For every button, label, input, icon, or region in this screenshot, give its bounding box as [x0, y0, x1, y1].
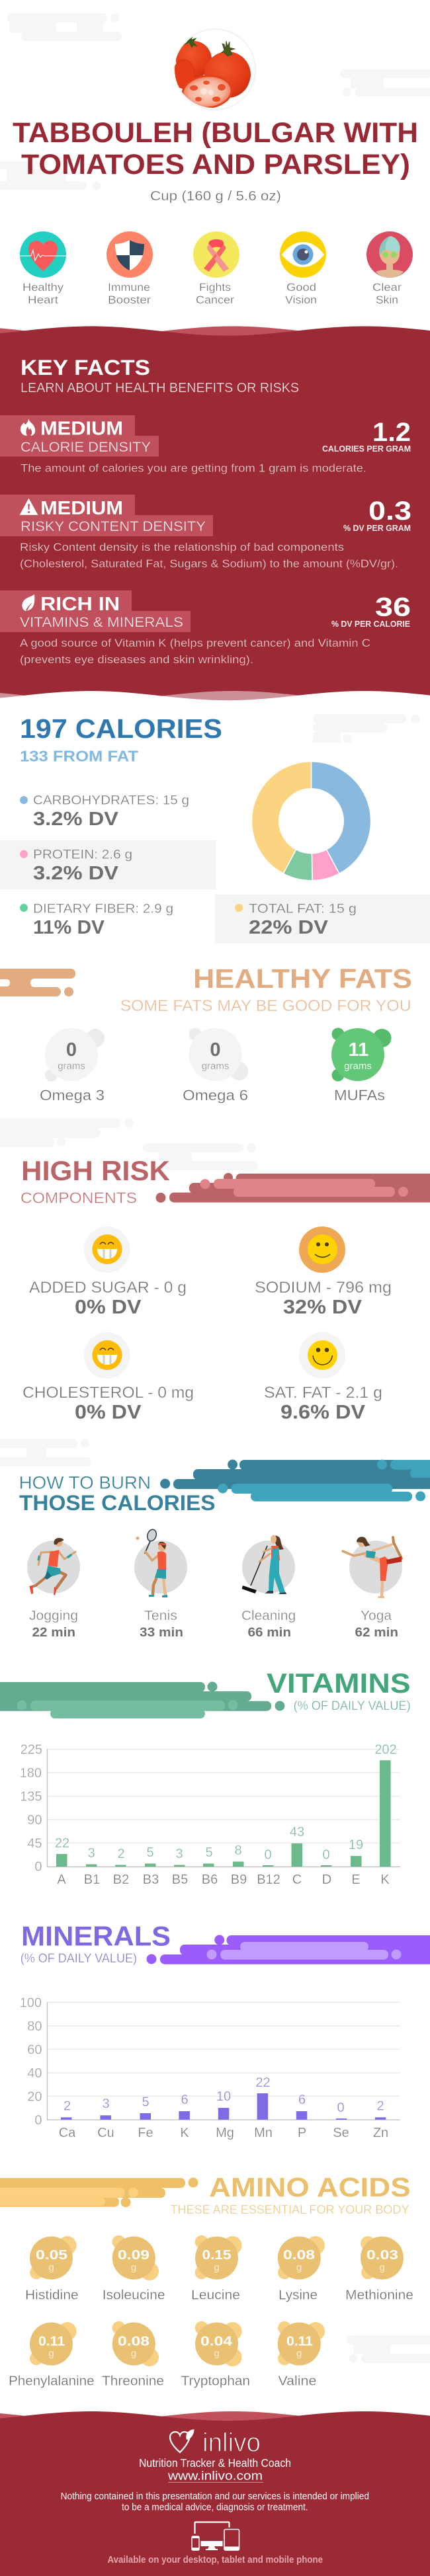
exercise: yoga	[343, 1537, 402, 1598]
risk: added sugar: 0% DV	[75, 1296, 142, 1318]
exercise labels: 66 min	[247, 1625, 291, 1640]
bar chart: minerals: 6	[181, 2093, 189, 2107]
bar chart: vitamins: 0	[34, 1860, 42, 1874]
exercise labels: Tenis	[144, 1609, 177, 1623]
bar chart: minerals: 5	[142, 2095, 150, 2110]
heading	[267, 1668, 411, 1713]
panel: footer	[0, 2411, 430, 2576]
fact: calorie density: CALORIE DENSITY	[21, 440, 151, 455]
website link: www.inlivo.com	[167, 2469, 263, 2483]
bar chart: minerals: Cu	[97, 2126, 114, 2140]
bar chart: vitamins: E	[351, 1872, 361, 1887]
fact: risky content density: % DV PER GRAM	[343, 523, 411, 533]
stat: omega 6: 0	[210, 1039, 221, 1061]
panel: high risk	[21, 1155, 430, 1424]
fact: risky content density: Risky Content density is the relationship of bad components	[20, 542, 344, 553]
bar chart: minerals: 0	[34, 2113, 42, 2128]
icon: devices	[192, 2522, 239, 2550]
benefit labels: Vision	[285, 294, 317, 306]
heading	[19, 1473, 215, 1515]
amino: lysine: Lysine	[279, 2288, 318, 2303]
bar chart: vitamins: 45	[27, 1836, 42, 1851]
bar chart: minerals: Se	[333, 2126, 349, 2140]
bar chart: minerals: Fe	[138, 2126, 153, 2140]
amino: threonine	[102, 2321, 164, 2389]
bar chart: minerals: Mn	[254, 2126, 273, 2140]
legend: carbohydrates	[20, 794, 189, 830]
donut chart	[251, 762, 371, 881]
panel: key facts	[0, 326, 430, 711]
legend: dietary fiber: DIETARY FIBER: 2.9 g	[33, 903, 173, 916]
benefit labels: Clear	[372, 282, 402, 294]
heading	[21, 1155, 170, 1207]
legend: protein	[0, 840, 216, 889]
stat: mufas: 11	[349, 1039, 368, 1061]
amino: histidine: Histidine	[25, 2288, 79, 2303]
amino: valine: Valine	[278, 2374, 316, 2389]
amino: leucine: g	[214, 2262, 220, 2273]
panel: minerals	[20, 1921, 430, 2140]
amino: valine	[278, 2321, 325, 2389]
bar chart: vitamins	[20, 1743, 400, 1887]
amino: isoleucine: Isoleucine	[103, 2288, 165, 2303]
exercise labels: Yoga	[361, 1609, 392, 1623]
amino: methionine: Methionine	[345, 2288, 413, 2303]
key facts heading: LEARN ABOUT HEALTH BENEFITS OR RISKS	[21, 381, 299, 395]
fact: risky content density: (Cholesterol, Saturated Fat, Sugars & Sodium) to the amount (%DV/gr).	[20, 558, 398, 570]
risk: added sugar	[29, 1227, 187, 1318]
benefit labels: Fights	[199, 282, 231, 294]
bar chart: minerals: 20	[27, 2089, 42, 2104]
heading: SOME FATS MAY BE GOOD FOR YOU	[120, 997, 411, 1015]
legend: carbohydrates: 3.2% DV	[33, 809, 119, 830]
amino: threonine: g	[131, 2348, 136, 2359]
amino: histidine: 0.05	[36, 2247, 67, 2263]
stat: omega 3: 0	[66, 1039, 77, 1061]
benefit labels: Heart	[28, 294, 58, 306]
risk: saturated fat: 9.6% DV	[280, 1402, 365, 1424]
bar chart: vitamins: 3	[87, 1846, 95, 1861]
icon: flame	[21, 419, 35, 436]
bar chart: minerals: Mg	[216, 2126, 234, 2140]
bar chart: minerals	[20, 1995, 400, 2140]
stat: omega 3: Omega 3	[40, 1087, 105, 1104]
bar chart: vitamins: 8	[234, 1843, 242, 1858]
exercise labels: 22 min	[32, 1625, 75, 1640]
risk: saturated fat	[264, 1332, 382, 1424]
fact: rich in vitamins and minerals	[0, 590, 411, 666]
bar chart: minerals: Ca	[59, 2126, 76, 2140]
bar chart: vitamins: 43	[290, 1825, 304, 1839]
amino: phenylalanine: Phenylalanine	[9, 2374, 95, 2389]
bar chart: vitamins: 3	[175, 1847, 183, 1861]
logo: inlivo: inlivo	[202, 2429, 261, 2458]
exercise: cleaning	[242, 1535, 295, 1594]
icon: immune booster	[107, 231, 153, 278]
heading: AMINO ACIDS	[209, 2172, 411, 2202]
availability note: Available on your desktop, tablet and mobile phone	[107, 2554, 323, 2565]
amino: lysine: 0.08	[283, 2247, 315, 2263]
bar chart: minerals: 10	[216, 2089, 231, 2104]
bar chart: vitamins: 5	[146, 1845, 154, 1860]
heading: VITAMINS	[267, 1668, 411, 1699]
logo: inlivo	[170, 2429, 261, 2458]
bar chart: vitamins: B1	[84, 1872, 100, 1887]
amino: leucine	[191, 2235, 242, 2303]
calories heading: 197 CALORIES	[20, 713, 222, 744]
icon: healthy heart	[20, 231, 66, 278]
legend: protein: 3.2% DV	[33, 863, 119, 884]
header ornament	[160, 1460, 430, 1502]
amino: isoleucine	[103, 2235, 165, 2303]
bar chart: vitamins: B2	[113, 1872, 129, 1887]
amino: phenylalanine: 0.11	[38, 2334, 65, 2349]
legend: carbohydrates: CARBOHYDRATES: 15 g	[33, 794, 189, 808]
benefit labels: Booster	[108, 294, 151, 306]
legend: dietary fiber: 11% DV	[33, 917, 105, 938]
calories heading: 133 FROM FAT	[20, 748, 139, 765]
exercise: jogging	[27, 1538, 80, 1595]
amino: methionine: g	[379, 2262, 385, 2273]
fact: calorie density	[0, 415, 411, 475]
bar chart: vitamins: 225	[21, 1743, 42, 1757]
bar chart: minerals: 100	[20, 1995, 42, 2010]
bar chart: minerals: 6	[298, 2093, 306, 2107]
risk: added sugar: ADDED SUGAR - 0 g	[29, 1279, 187, 1297]
bar chart: vitamins: C	[292, 1872, 302, 1887]
amino: methionine	[345, 2236, 413, 2303]
bar chart: minerals: Zn	[373, 2126, 388, 2140]
benefits row	[20, 231, 413, 306]
fact: rich in vitamins and minerals: 36	[375, 593, 411, 622]
amino: lysine: g	[296, 2262, 302, 2273]
icon: clear skin	[366, 231, 413, 278]
heading: COMPONENTS	[21, 1189, 137, 1207]
bar chart: vitamins: A	[57, 1872, 66, 1887]
exercise labels	[29, 1609, 398, 1640]
icon: warning triangle	[20, 499, 38, 515]
amino: histidine	[25, 2236, 79, 2303]
calories heading	[20, 713, 222, 765]
title: TOMATOES AND PARSLEY)	[21, 149, 410, 181]
key facts heading	[21, 356, 299, 395]
bar chart: vitamins: 19	[349, 1838, 363, 1853]
bar chart: vitamins: D	[322, 1872, 331, 1887]
amino: tryptophan: 0.04	[200, 2334, 233, 2349]
exercise labels: 62 min	[355, 1625, 398, 1640]
risk: sodium: 32% DV	[283, 1296, 362, 1318]
bar chart: minerals: 40	[27, 2066, 42, 2081]
bar chart: minerals: K	[180, 2126, 189, 2140]
legend: dietary fiber	[20, 903, 173, 938]
amino: threonine: Threonine	[102, 2374, 164, 2389]
stat: mufas	[331, 1027, 392, 1104]
heading: (% OF DAILY VALUE)	[21, 1951, 137, 1966]
title	[13, 117, 418, 181]
amino: isoleucine: 0.09	[118, 2247, 150, 2263]
stat: mufas: grams	[344, 1061, 372, 1072]
benefit labels: Cancer	[196, 294, 235, 306]
key facts heading: KEY FACTS	[21, 356, 150, 380]
amino: leucine: 0.15	[202, 2247, 232, 2263]
legend: total fat: 22% DV	[249, 917, 329, 938]
risk: cholesterol	[22, 1332, 194, 1424]
header ornament	[0, 2178, 198, 2207]
panel: vitamins	[0, 1668, 411, 1887]
header ornament	[0, 1682, 284, 1718]
amino: histidine: g	[48, 2262, 54, 2273]
bar chart: minerals: 22	[255, 2075, 271, 2090]
fact: risky content density: RISKY CONTENT DENSITY	[21, 519, 206, 534]
amino: tryptophan: Tryptophan	[181, 2374, 250, 2389]
heading: (% OF DAILY VALUE)	[294, 1699, 411, 1713]
benefit labels: Skin	[376, 294, 398, 306]
bar chart: minerals: 2	[64, 2099, 71, 2114]
amino: valine: g	[296, 2348, 302, 2359]
bar chart: minerals: 60	[27, 2042, 42, 2057]
benefit labels: Good	[286, 282, 316, 294]
amino: phenylalanine	[9, 2322, 95, 2389]
image: tomatoes	[173, 29, 255, 110]
heading: HOW TO BURN	[19, 1473, 151, 1493]
icon: fights cancer ribbon	[193, 231, 239, 278]
bar chart: vitamins: B6	[202, 1872, 218, 1887]
fact: calorie density: The amount of calories you are getting from 1 gram is moderate.	[21, 463, 366, 475]
bar chart: vitamins: 0	[322, 1848, 330, 1863]
amino: methionine: 0.03	[366, 2247, 398, 2263]
stat: mufas: MUFAs	[334, 1087, 385, 1104]
benefit labels	[22, 282, 402, 306]
exercise labels: Cleaning	[241, 1609, 296, 1623]
tagline: Nutrition Tracker & Health Coach	[139, 2456, 291, 2470]
amino: lysine	[278, 2236, 325, 2303]
bar chart: vitamins: B5	[172, 1872, 188, 1887]
heading: THOSE CALORIES	[19, 1491, 216, 1515]
fact: calorie density: MEDIUM	[40, 419, 123, 440]
stat: omega 6	[183, 1027, 249, 1104]
risk: cholesterol: CHOLESTEROL - 0 mg	[22, 1384, 194, 1402]
fact: rich in vitamins and minerals: VITAMINS & MINERALS	[20, 615, 183, 630]
fact: risky content density: 0.3	[368, 497, 411, 526]
fact: risky content density	[0, 495, 411, 570]
amino: tryptophan	[181, 2321, 250, 2389]
bar chart: vitamins: 2	[117, 1847, 125, 1861]
icon: leaf	[22, 594, 34, 611]
legend: total fat: TOTAL FAT: 15 g	[249, 903, 357, 916]
fact: rich in vitamins and minerals: RICH IN	[40, 594, 120, 615]
title: TABBOULEH (BULGAR WITH	[13, 117, 418, 149]
heading: HEALTHY FATS	[193, 963, 412, 994]
heading	[120, 963, 412, 1015]
benefit labels: Immune	[108, 282, 150, 294]
bar chart: minerals: 80	[27, 2019, 42, 2034]
bar chart: vitamins: B12	[257, 1872, 280, 1887]
bar chart: vitamins: 22	[55, 1836, 69, 1851]
panel: amino acids	[0, 2172, 413, 2389]
heading	[171, 2172, 411, 2216]
fact: rich in vitamins and minerals: % DV PER CALORIE	[331, 619, 410, 629]
fact: rich in vitamins and minerals: (prevents eye diseases and skin wrinkling).	[20, 654, 253, 666]
bar chart: vitamins: 135	[20, 1790, 42, 1804]
header ornament	[0, 969, 75, 996]
heading: HIGH RISK	[21, 1155, 170, 1186]
exercise labels: Jogging	[29, 1609, 78, 1623]
risk: cholesterol: 0% DV	[75, 1402, 142, 1424]
disclaimer	[61, 2491, 369, 2513]
heading	[21, 1921, 171, 1966]
bar chart: minerals: 2	[376, 2099, 384, 2114]
bar chart: vitamins: 0	[264, 1848, 272, 1863]
bar chart: vitamins: K	[380, 1872, 390, 1887]
heading: MINERALS	[21, 1921, 171, 1952]
panel: calories	[0, 713, 430, 944]
stat: omega 6: grams	[202, 1061, 229, 1072]
stat: omega 3	[40, 1028, 105, 1104]
disclaimer: Nothing contained in this presentation and our services is intended or implied	[61, 2491, 369, 2502]
heading: THESE ARE ESSENTIAL FOR YOUR BODY	[171, 2202, 409, 2216]
header ornament	[156, 1173, 430, 1203]
amino: threonine: 0.08	[118, 2334, 150, 2349]
bar chart: vitamins: 90	[27, 1813, 42, 1828]
fact: rich in vitamins and minerals: A good source of Vitamin K (helps prevent cancer) and Vitamin C	[20, 637, 370, 649]
bar chart: vitamins: B3	[143, 1872, 159, 1887]
bar chart: vitamins: 202	[374, 1743, 397, 1757]
benefit labels: Healthy	[22, 282, 64, 294]
panel: how to burn	[19, 1460, 430, 1640]
risk: sodium: SODIUM - 796 mg	[255, 1279, 392, 1297]
legend: protein: PROTEIN: 2.6 g	[33, 848, 132, 862]
bar chart: minerals: 3	[102, 2097, 110, 2111]
amino: tryptophan: g	[214, 2348, 220, 2359]
stat: omega 3: grams	[58, 1061, 85, 1072]
disclaimer: to be a medical advice, diagnosis or treatment.	[122, 2502, 308, 2513]
risk: saturated fat: SAT. FAT - 2.1 g	[264, 1384, 382, 1402]
legend: total fat	[215, 895, 430, 944]
exercise labels: 33 min	[140, 1625, 183, 1640]
header ornament	[147, 1935, 430, 1964]
serving size: Cup (160 g / 5.6 oz)	[150, 188, 281, 204]
icon: good vision	[280, 231, 326, 278]
bar chart: minerals: 0	[337, 2101, 345, 2115]
amino: phenylalanine: g	[48, 2348, 54, 2359]
fact: calorie density: CALORIES PER GRAM	[322, 444, 411, 454]
bar chart: vitamins: 180	[20, 1766, 42, 1781]
fact: calorie density: 1.2	[372, 418, 411, 447]
amino: isoleucine: g	[131, 2262, 136, 2273]
amino: leucine: Leucine	[191, 2288, 240, 2303]
bar chart: vitamins: B9	[231, 1872, 247, 1887]
fact: risky content density: MEDIUM	[40, 498, 123, 519]
exercise: tenis	[134, 1528, 187, 1597]
amino: valine: 0.11	[286, 2334, 313, 2349]
stat: omega 6: Omega 6	[183, 1087, 248, 1104]
bar chart: minerals: P	[298, 2126, 306, 2140]
bar chart: vitamins: 5	[205, 1845, 213, 1860]
risk: sodium	[255, 1227, 392, 1318]
panel: healthy fats	[0, 963, 412, 1104]
